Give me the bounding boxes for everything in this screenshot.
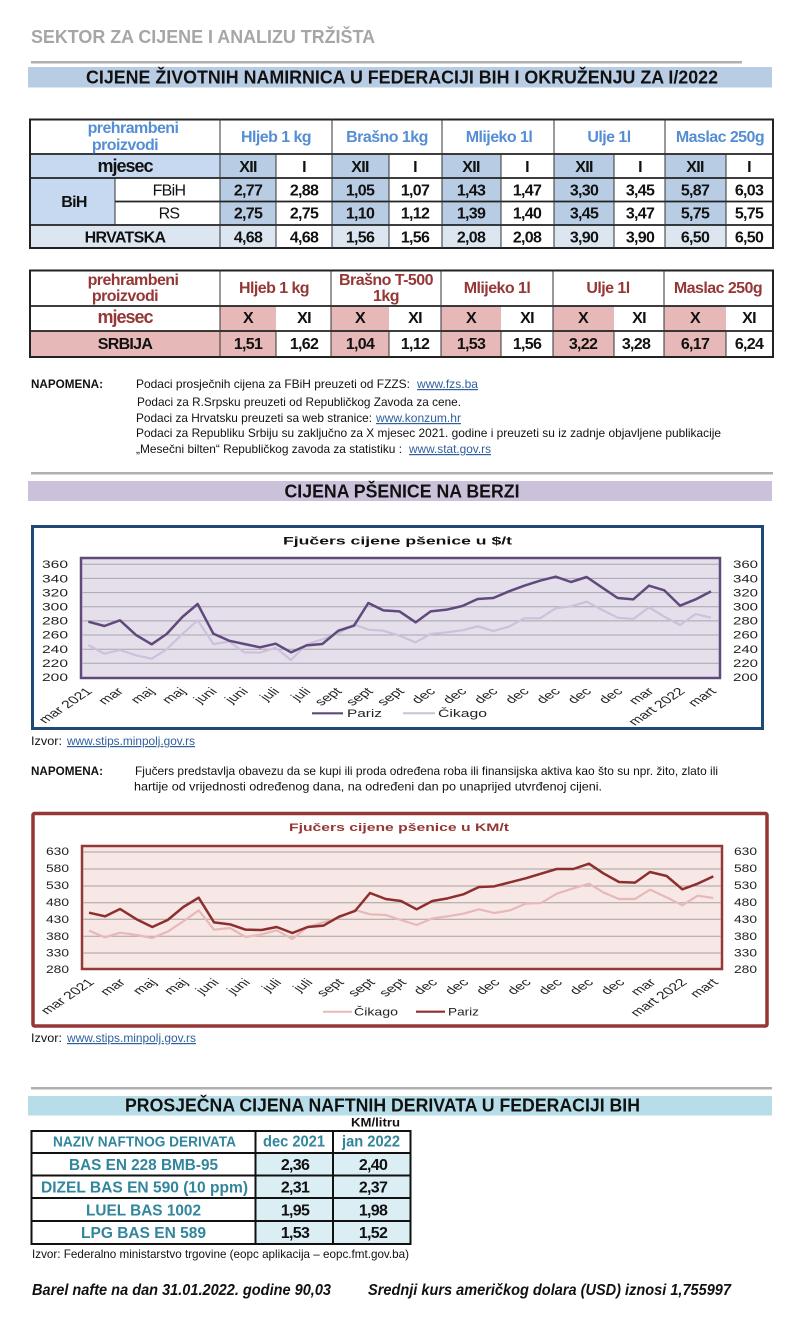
chart: wheat futures in KM per tonne — [33, 814, 767, 1026]
note: data sources: Podaci za R.Srpsku preuzeti od Republičkog Zavoda za cene. — [137, 395, 461, 409]
right axis: 480 — [734, 897, 757, 909]
row: FBiH: FBiH — [153, 182, 186, 200]
row: RS: RS — [159, 206, 179, 222]
source: chart 2: www.stips.minpolj.gov.rs — [66, 1031, 196, 1045]
row: Hrvatska: 2,08 — [513, 230, 542, 246]
left axis: 530 — [46, 880, 69, 892]
row: FBiH: 5,87 — [681, 182, 710, 200]
left axis: 580 — [46, 863, 69, 875]
unit label: KM/litru — [351, 1116, 400, 1130]
row: Luel — [86, 1203, 388, 1220]
month labels: juli — [258, 976, 285, 994]
row: Luel: 1,95 — [281, 1203, 310, 1220]
month labels: maj — [158, 685, 189, 706]
month labels: juli — [287, 685, 314, 703]
row: Hrvatska: 1,56 — [401, 230, 430, 246]
table header row: Mlijeko 1l — [466, 129, 532, 146]
month labels: mar 2021 — [37, 976, 97, 1017]
row: FBiH: 6,03 — [735, 182, 764, 200]
row: RS: 5,75 — [735, 206, 764, 222]
month labels: sept — [374, 685, 408, 708]
left axis: 330 — [46, 948, 69, 960]
row: BAS EN 228: BAS EN 228 BMB-95 — [69, 1157, 218, 1174]
right axis: 630 — [734, 846, 757, 858]
row: FBiH: 2,88 — [290, 182, 319, 200]
right axis: 430 — [734, 914, 757, 926]
table header row: Brašno 1kg — [346, 129, 428, 146]
month labels: juni — [189, 685, 220, 706]
table: fuel prices — [31, 1131, 411, 1244]
right axis: 340 — [733, 573, 758, 585]
right axis: 220 — [733, 658, 758, 670]
legend: Pariz — [347, 708, 382, 720]
Serbia header row: Brašno T-500 — [339, 272, 434, 289]
left axis: 380 — [46, 931, 69, 943]
month labels: dec — [566, 976, 597, 997]
left axis — [46, 846, 69, 976]
row: LPG — [81, 1225, 388, 1242]
row: Hrvatska: 1,56 — [346, 230, 375, 246]
right axis: 280 — [733, 616, 758, 628]
Serbia price row: 6,24 — [735, 336, 764, 353]
source: chart 1: Izvor: — [31, 734, 62, 748]
heading: wheat price — [28, 480, 772, 502]
left axis: 220 — [42, 658, 68, 670]
month row: I — [747, 159, 751, 176]
right axis: 200 — [733, 672, 758, 684]
month labels: maj — [160, 976, 191, 997]
month labels: sept — [311, 685, 345, 708]
month labels: maj — [129, 976, 160, 997]
left axis: 280 — [46, 964, 69, 976]
row: Hrvatska: 6,50 — [681, 230, 710, 246]
Serbia price row — [98, 336, 764, 353]
line: Cikago — [88, 602, 711, 660]
Serbia month row: XI — [297, 310, 311, 327]
note: futures definition: NAPOMENA: — [31, 764, 103, 778]
month labels: juli — [256, 685, 283, 703]
Serbia price row: 3,22 — [569, 336, 598, 353]
legend — [312, 707, 487, 720]
row: RS: 2,75 — [290, 206, 319, 222]
Serbia header row: prehrambeni — [88, 272, 179, 289]
left axis: 340 — [42, 573, 68, 585]
row: FBiH: 3,45 — [626, 182, 655, 200]
left axis: 260 — [42, 630, 68, 642]
Serbia month row: XI — [632, 310, 646, 327]
line: Pariz — [89, 864, 713, 933]
month labels: sept — [376, 976, 410, 999]
row: FBiH: 1,43 — [457, 182, 486, 200]
month labels: juni — [223, 976, 253, 997]
legend: Čikago — [354, 1006, 398, 1018]
table header row: prehrambeni — [88, 120, 179, 137]
left axis: 320 — [42, 588, 68, 600]
right axis — [734, 846, 757, 976]
Serbia header row: Ulje 1l — [586, 280, 630, 297]
note: data sources: Podaci prosječnih cijena za FBiH preuzeti od FZZS: — [136, 377, 410, 391]
source: chart 2: Izvor: — [31, 1031, 62, 1045]
month row: I — [413, 159, 417, 176]
row: BAS EN 228: 2,40 — [359, 1157, 388, 1174]
left axis: 300 — [42, 602, 68, 614]
table header row: Maslac 250g — [676, 129, 764, 146]
right axis: 580 — [734, 863, 757, 875]
Serbia price row: 1,51 — [234, 336, 263, 353]
row: FBiH: 1,07 — [401, 182, 430, 200]
note: data sources: www.stat.gov.rs — [408, 442, 491, 456]
table: food prices Serbia — [30, 270, 773, 357]
Serbia price row: 1,12 — [401, 336, 430, 353]
month labels: dec — [472, 976, 503, 997]
month labels: dec — [410, 976, 441, 997]
month labels: dec — [504, 976, 534, 997]
Serbia price row: SRBIJA — [98, 336, 153, 353]
month row — [97, 156, 751, 176]
month labels: dec — [533, 685, 564, 706]
month row: I — [302, 159, 306, 176]
row: FBiH — [61, 182, 764, 211]
note: data sources: Podaci za Hrvatsku preuzeti sa web stranice: — [136, 411, 372, 425]
Serbia month row: mjesec — [97, 307, 154, 327]
month labels: dec — [535, 976, 566, 997]
month labels: dec — [439, 685, 470, 706]
month labels: mar — [625, 685, 657, 707]
note: data sources: Podaci za Republiku Srbiju su zaključno za X mjesec 2021. godine i preuzeti su iz zadnje objavljene publikacije — [136, 426, 721, 440]
Serbia price row: 1,56 — [513, 336, 542, 353]
Serbia month row: XI — [408, 310, 422, 327]
row: RS: 2,75 — [234, 206, 263, 222]
month labels: dec — [595, 685, 626, 706]
month labels: sept — [313, 976, 347, 999]
row: Dizel: 2,37 — [359, 1180, 388, 1197]
month labels: dec — [564, 685, 595, 706]
fuel table header: jan 2022 — [341, 1134, 400, 1150]
left axis: 360 — [42, 559, 68, 571]
right axis: 360 — [733, 559, 758, 571]
month labels: mart — [686, 976, 722, 1000]
right axis: 330 — [734, 948, 757, 960]
right axis — [733, 559, 758, 684]
Serbia month row: XI — [520, 310, 534, 327]
Serbia header row — [88, 272, 762, 305]
table header row — [88, 120, 764, 154]
row: FBiH: 3,30 — [570, 182, 599, 200]
right axis: 380 — [734, 931, 757, 943]
source: fuel table: Izvor: Federalno ministarstvo trgovine (eopc aplikacija – eopc.fmt.gov.ba) — [32, 1247, 409, 1261]
month labels: mart 2022 — [627, 976, 690, 1019]
right axis: 280 — [734, 964, 757, 976]
month labels: dec — [470, 685, 501, 706]
month row: mjesec — [97, 156, 154, 176]
left axis: 480 — [46, 897, 69, 909]
row: FBiH: 1,47 — [513, 182, 542, 200]
note: data sources: www.konzum.hr — [375, 411, 461, 425]
left axis: 240 — [42, 644, 68, 656]
note: data sources: www.fzs.ba — [416, 377, 478, 391]
table header row: Hljeb 1 kg — [241, 129, 311, 146]
month labels: dec — [502, 685, 532, 706]
month labels — [35, 685, 720, 728]
row: Hrvatska — [85, 230, 764, 246]
Serbia month row: X — [578, 310, 589, 327]
Serbia price row: 1,62 — [290, 336, 319, 353]
Serbia header row: Mlijeko 1l — [464, 280, 530, 297]
page header: sector name: SEKTOR ZA CIJENE I ANALIZU TRŽIŠTA — [31, 26, 375, 47]
row: RS: 5,75 — [681, 206, 710, 222]
right axis: 530 — [734, 880, 757, 892]
month labels: juni — [191, 976, 222, 997]
row: RS: 3,45 — [570, 206, 599, 222]
Serbia price row: 3,28 — [622, 336, 651, 353]
Serbia header row: Maslac 250g — [674, 280, 762, 297]
row: LPG: LPG BAS EN 589 — [81, 1225, 206, 1242]
month row: I — [525, 159, 529, 176]
note: futures definition — [31, 764, 718, 794]
row: BAS EN 228 — [69, 1157, 388, 1174]
month labels: mart — [684, 685, 720, 709]
row: FBiH: 1,05 — [346, 182, 375, 200]
month row: I — [638, 159, 642, 176]
line: Pariz — [88, 577, 711, 652]
right axis: 320 — [733, 588, 758, 600]
chart title: Fjučers cijene pšenice u $/t — [283, 536, 513, 548]
table: food prices Federation BiH and Croatia — [30, 119, 773, 248]
row: LPG: 1,53 — [281, 1225, 310, 1242]
month row: XII — [686, 159, 704, 176]
row: RS: 1,39 — [457, 206, 486, 222]
row: Luel: 1,98 — [359, 1203, 388, 1220]
row: RS: 3,47 — [626, 206, 655, 222]
month labels — [37, 976, 722, 1019]
note: futures definition: hartije od vrijednosti određenog dana, na određeni dan po unaprijed utvrđenoj cijeni. — [134, 780, 602, 794]
month labels: maj — [127, 685, 158, 706]
Serbia month row — [97, 307, 756, 327]
Serbia price row: 1,53 — [457, 336, 486, 353]
row: Hrvatska: HRVATSKA — [85, 230, 166, 246]
note: data sources — [31, 377, 721, 456]
month labels: mart 2022 — [625, 685, 688, 728]
row: Dizel — [41, 1180, 388, 1197]
Serbia price row: 6,17 — [681, 336, 710, 353]
month row: XII — [351, 159, 369, 176]
Serbia month row: X — [466, 310, 477, 327]
row: Hrvatska: 3,90 — [570, 230, 599, 246]
row: FBiH: 2,77 — [234, 182, 263, 200]
Serbia month row: XI — [742, 310, 756, 327]
month row: XII — [575, 159, 593, 176]
month labels: juli — [289, 976, 316, 994]
month row: XII — [239, 159, 257, 176]
Serbia price row: 1,04 — [346, 336, 375, 353]
fuel table header: NAZIV NAFTNOG DERIVATA — [53, 1134, 236, 1150]
month labels: mar — [95, 685, 127, 707]
Serbia header row: proizvodi — [92, 288, 158, 305]
row: RS: 1,10 — [346, 206, 375, 222]
month labels: dec — [597, 976, 628, 997]
note: futures definition: Fjučers predstavlja obavezu da se kupi ili proda određena roba ili finansijska aktiva kao što su npr. žito, zlato ili — [135, 764, 718, 778]
heading: wheat price: CIJENA PŠENICE NA BERZI — [284, 480, 520, 502]
row: Hrvatska: 6,50 — [735, 230, 764, 246]
chart title: Fjučers cijene pšenice u KM/t — [289, 822, 509, 834]
month row: XII — [462, 159, 480, 176]
source: chart 1: www.stips.minpolj.gov.rs — [66, 734, 195, 748]
footer: USD exchange rate: Srednji kurs američkog dolara (USD) iznosi 1,755997 — [368, 1282, 732, 1299]
month labels: sept — [344, 976, 378, 999]
row: Luel: LUEL BAS 1002 — [86, 1203, 201, 1220]
Serbia month row: X — [243, 310, 254, 327]
month labels: mar — [97, 976, 129, 998]
month labels: sept — [342, 685, 376, 708]
row: Hrvatska: 4,68 — [290, 230, 319, 246]
month labels: mar — [627, 976, 659, 998]
legend — [323, 1006, 479, 1018]
note: data sources: „Mesečni bilten“ Republičkog zavoda za statistiku : — [136, 442, 402, 456]
row: Hrvatska: 4,68 — [234, 230, 263, 246]
month labels: dec — [441, 976, 472, 997]
Serbia header row: Hljeb 1 kg — [239, 280, 309, 297]
heading: fuel prices: PROSJEČNA CIJENA NAFTNIH DERIVATA U FEDERACIJI BIH — [125, 1094, 640, 1116]
month labels: dec — [408, 685, 439, 706]
row: RS — [159, 206, 764, 222]
left axis: 280 — [42, 616, 68, 628]
chart: wheat futures in USD per tonne — [32, 526, 762, 728]
row: Dizel: DIZEL BAS EN 590 (10 ppm) — [41, 1180, 248, 1197]
left axis: 430 — [46, 914, 69, 926]
Serbia month row: X — [690, 310, 701, 327]
Serbia month row: X — [355, 310, 366, 327]
note: data sources: NAPOMENA: — [31, 377, 103, 391]
row: Hrvatska: 2,08 — [457, 230, 486, 246]
row: Dizel: 2,31 — [281, 1180, 310, 1197]
fuel table header — [53, 1134, 400, 1150]
row: RS: 1,12 — [401, 206, 430, 222]
footer: oil barrel price: Barel nafte na dan 31.01.2022. godine 90,03 — [32, 1282, 331, 1299]
right axis: 300 — [733, 602, 758, 614]
row: BAS EN 228: 2,36 — [281, 1157, 310, 1174]
left axis — [42, 559, 68, 684]
heading: food prices: CIJENE ŽIVOTNIH NAMIRNICA U FEDERACIJI BIH I OKRUŽENJU ZA I/2022 — [86, 66, 718, 88]
fuel table header: dec 2021 — [263, 1134, 325, 1150]
row: RS: 1,40 — [513, 206, 542, 222]
table header row: proizvodi — [92, 137, 158, 154]
row: Hrvatska: 3,90 — [626, 230, 655, 246]
right axis: 240 — [733, 644, 758, 656]
month labels: juni — [221, 685, 251, 706]
row: FBiH: BiH — [61, 194, 87, 211]
left axis: 630 — [46, 846, 69, 858]
Serbia header row: 1kg — [373, 288, 399, 305]
month labels: mar 2021 — [35, 685, 95, 726]
right axis: 260 — [733, 630, 758, 642]
legend: Pariz — [448, 1006, 479, 1018]
table header row: Ulje 1l — [587, 129, 631, 146]
legend: Čikago — [438, 707, 487, 720]
line: Cikago — [89, 884, 713, 939]
left axis: 200 — [42, 672, 68, 684]
row: LPG: 1,52 — [359, 1225, 388, 1242]
